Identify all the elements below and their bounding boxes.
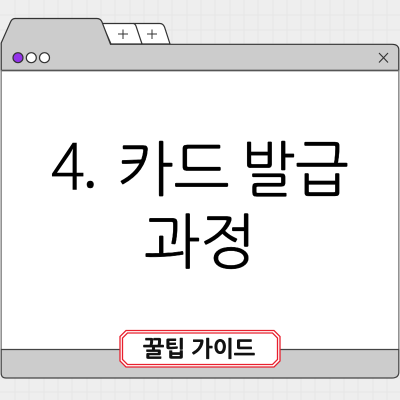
title: 카드 bbox=[117, 136, 230, 204]
title bar with main tab bbox=[1, 18, 399, 70]
window controls bbox=[13, 53, 50, 63]
badge: 꿀팁 가이드: 꿀팁 가이드 bbox=[143, 336, 255, 362]
title: 과정 bbox=[144, 209, 256, 276]
tab: plus 2 bbox=[134, 24, 170, 44]
window body bbox=[2, 60, 398, 360]
badge: 꿀팁 가이드 bbox=[120, 330, 280, 367]
title bbox=[51, 116, 349, 276]
tab: plus 1 bbox=[102, 24, 142, 44]
title: 4. bbox=[51, 116, 95, 208]
title: 발급 bbox=[241, 136, 349, 204]
window side borders bbox=[1, 70, 399, 349]
icon: close bbox=[379, 53, 388, 62]
footer bar bbox=[1, 350, 399, 378]
